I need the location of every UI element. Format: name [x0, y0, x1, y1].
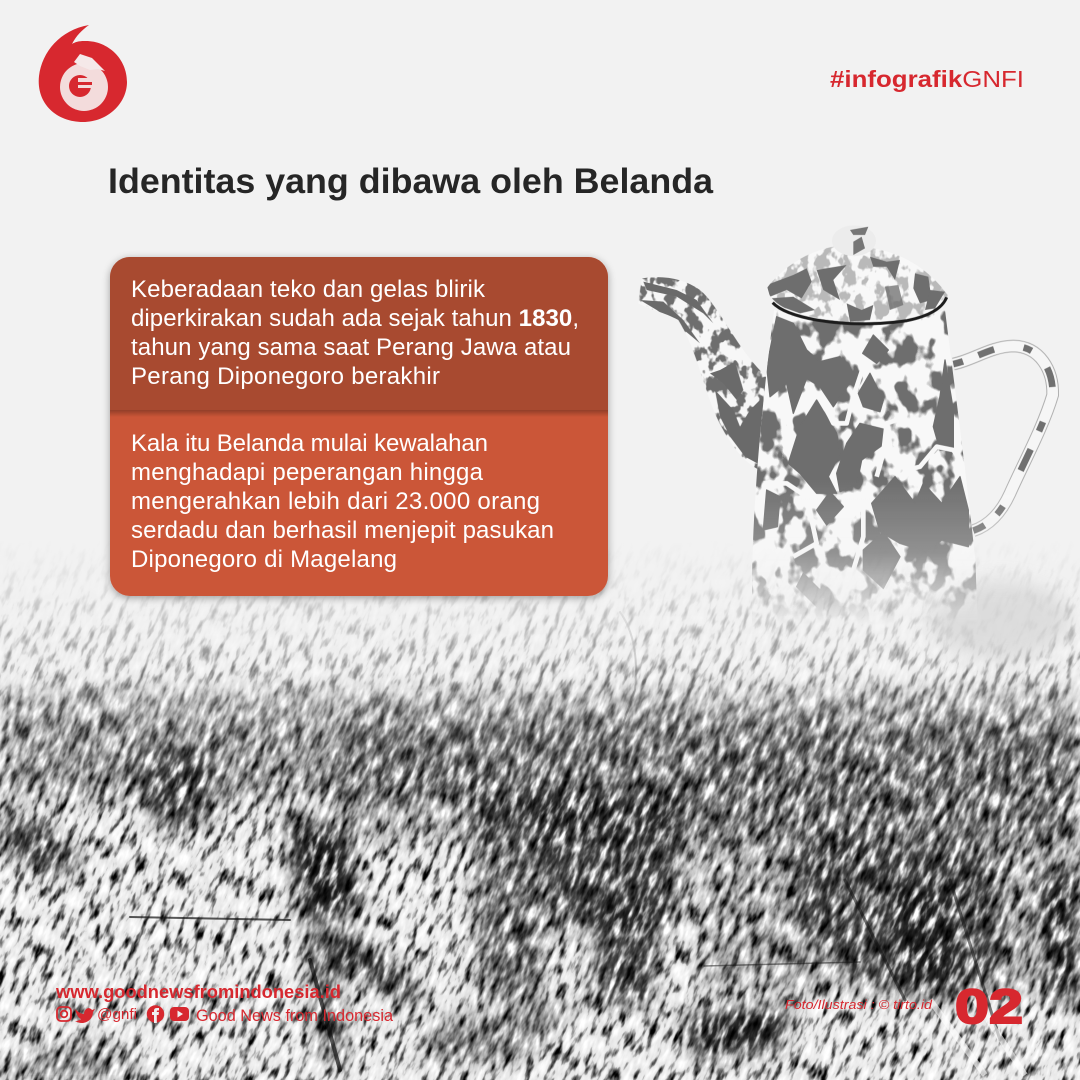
- text block: bottom: [131, 430, 554, 573]
- text block: bottom: serdadu dan berhasil menjepit pasukan: [131, 517, 554, 544]
- text block: top: Perang Diponegoro berakhir: [131, 363, 440, 390]
- battle illustration: [0, 540, 1080, 1080]
- title: Identitas yang dibawa oleh Belanda: [108, 162, 714, 201]
- icon: youtube: [170, 1007, 189, 1021]
- text block: top: diperkirakan sudah ada sejak tahun 1830,: [131, 305, 579, 332]
- icon: facebook: [147, 1005, 164, 1023]
- panel: top card: [110, 257, 608, 410]
- logo: [39, 25, 127, 122]
- logo emblem: [60, 54, 108, 111]
- photo credit: Foto/Ilustrasi : © tirto.id: [785, 998, 933, 1012]
- icon: instagram: [57, 1007, 71, 1021]
- text block: bottom: Kala itu Belanda mulai kewalahan: [131, 430, 488, 457]
- card: [110, 257, 608, 596]
- text block: top: Keberadaan teko dan gelas blirik: [131, 276, 486, 303]
- fog patch beside teapot: [930, 580, 1070, 660]
- footer: social row: [57, 1005, 394, 1025]
- text block: top: [131, 276, 579, 390]
- teapot handle: [953, 346, 1053, 531]
- page number: 02: [955, 981, 1023, 1034]
- text block: bottom: mengerahkan lebih dari 23.000 orang: [131, 488, 540, 515]
- footer: website: www.goodnewsfromindonesia.id: [55, 982, 341, 1002]
- handle: @gnfi: [97, 1007, 137, 1023]
- texture: [0, 540, 1080, 1080]
- icon: twitter: [75, 1008, 95, 1023]
- text block: bottom: menghadapi peperangan hingga: [131, 459, 484, 486]
- text block: bottom: Diponegoro di Magelang: [131, 546, 397, 573]
- text block: top: tahun yang sama saat Perang Jawa atau: [131, 334, 571, 361]
- teapot spout: [638, 277, 766, 469]
- white veins: [763, 370, 964, 570]
- hashtag: #infografik GNFI: [830, 66, 1024, 92]
- teapot lid: [768, 226, 948, 326]
- panel: bottom card: [110, 257, 608, 596]
- teapot knob: [834, 226, 872, 256]
- teapot photo: [633, 225, 1053, 640]
- channel name: Good News from Indonesia: [196, 1007, 394, 1025]
- teapot body: [752, 310, 976, 620]
